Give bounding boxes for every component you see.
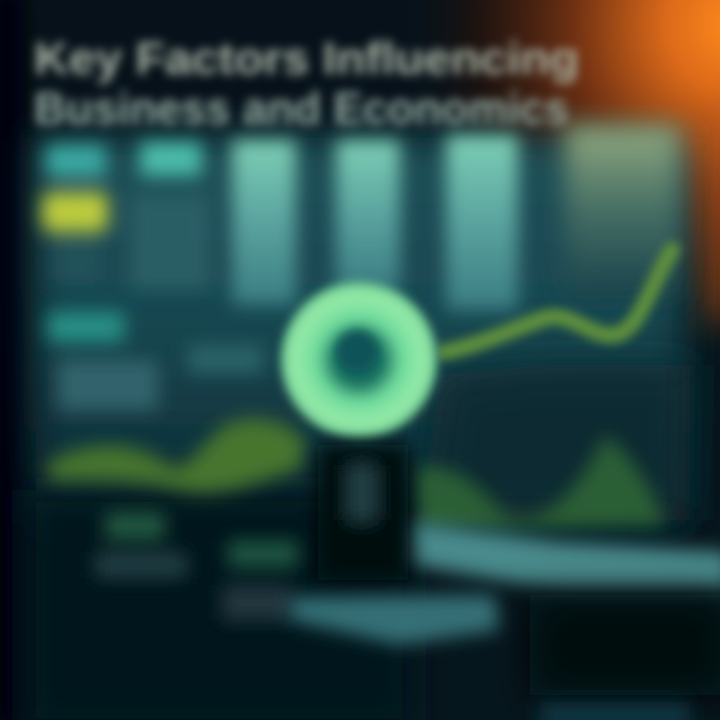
text one <box>95 552 187 578</box>
body text block <box>58 360 158 410</box>
column 1 <box>46 145 106 280</box>
column 1 yellow tag <box>42 192 108 232</box>
title: Key Factors Influencing <box>34 33 579 84</box>
central donut <box>281 282 437 438</box>
column headers and bars <box>42 125 680 310</box>
green line chart right <box>445 250 672 352</box>
bottom-left labels <box>95 512 298 621</box>
label one <box>105 512 165 540</box>
teal label <box>48 312 124 342</box>
column 2 <box>130 142 210 290</box>
title: Business and Economics <box>34 83 569 134</box>
column 3 <box>232 140 296 305</box>
donut centre <box>337 331 377 371</box>
bottom right teal shelf <box>415 522 720 590</box>
green area chart left <box>48 419 305 493</box>
bottom centre teal shelf <box>290 595 500 645</box>
bottom edge strip <box>540 702 690 720</box>
main teal panel <box>36 138 684 523</box>
mountain dark right <box>420 365 690 520</box>
label two <box>228 540 298 568</box>
green area chart right <box>415 435 665 530</box>
bottom right dark block <box>530 595 720 695</box>
left mid text blocks <box>48 312 263 410</box>
central dark pillar <box>318 445 408 580</box>
lower-left dark area <box>24 490 414 720</box>
secondary label <box>188 345 263 373</box>
title <box>34 33 579 134</box>
column 4 <box>336 140 400 290</box>
text two <box>222 585 292 621</box>
column 6 <box>565 125 680 300</box>
column 5 <box>446 135 518 310</box>
